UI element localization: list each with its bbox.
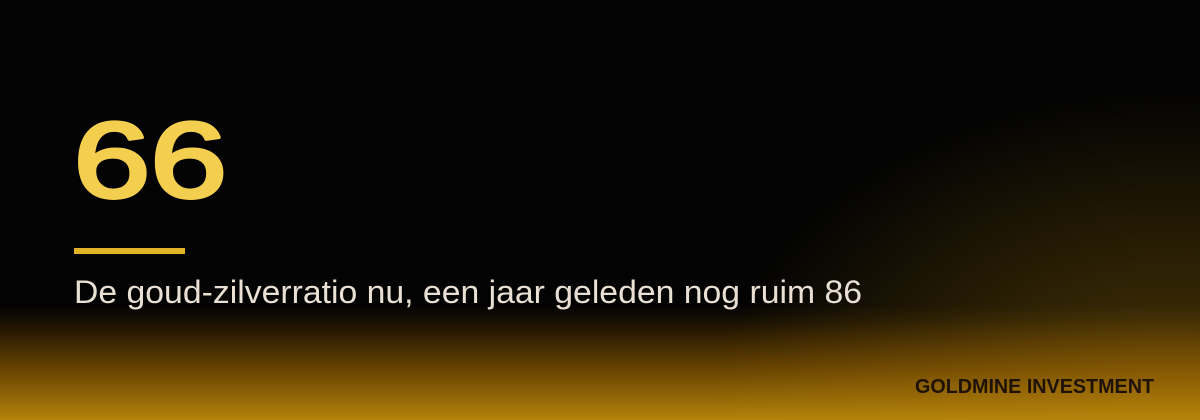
brand label: GOLDMINE INVESTMENT [915, 376, 1154, 398]
accent rule [74, 248, 185, 254]
caption: De goud-zilverratio nu, een jaar geleden nog ruim 86 [74, 274, 862, 310]
big number: 66 [74, 101, 227, 220]
